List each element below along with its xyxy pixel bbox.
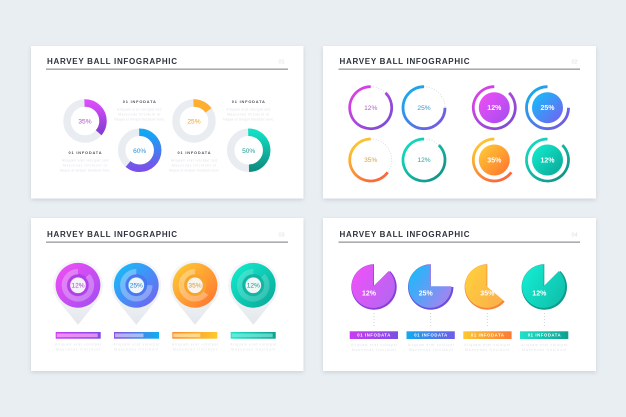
pie 12% teal: 12%: [532, 291, 547, 298]
progress bar blue: [114, 332, 159, 339]
progress bar orange: [172, 332, 217, 339]
text block: infodata below 25%: [169, 150, 219, 172]
label teal: 01 INFODATA: [528, 333, 561, 338]
donut 25%: [176, 103, 212, 139]
pie 35% orange: 35%: [480, 291, 495, 298]
pie 12% purple: [351, 264, 397, 310]
progress bar teal: [231, 332, 276, 339]
text block: infodata above 60%: Aliquam erat volutpat sed: [117, 107, 161, 111]
ring with disc 25% blue: 25%: [540, 105, 555, 112]
captions under labels: Aliquam erat volutpat: [408, 343, 454, 347]
text block: infodata below 25%: 01 INFODATA: [178, 150, 211, 155]
captions under bars: Aliquam erat volutpat: [172, 342, 218, 346]
captions under labels: [351, 343, 567, 352]
text block: infodata below 35%: [60, 150, 110, 172]
panel: donut charts 01: [31, 46, 304, 198]
text block: infodata below 35%: 01 INFODATA: [68, 150, 102, 155]
heading 04: HARVEY BALL INFOGRAPHIC: [340, 230, 470, 239]
captions under bars: [55, 342, 276, 352]
donut 50%: 50%: [242, 148, 255, 155]
text block: infodata above 60%: 01 INFODATA: [123, 99, 156, 104]
page number 03: 03: [278, 232, 285, 238]
captions under labels: Maecenas tincidunt: [465, 348, 509, 352]
captions under labels: Aliquam erat volutpat: [521, 343, 567, 347]
pie 12% purple: 12%: [362, 291, 377, 298]
ring 12% teal: 12%: [417, 157, 431, 164]
ring with disc 12% teal: 12%: [540, 157, 555, 164]
text block: infodata below 25%: Aliquam erat volutpat sed: [171, 158, 217, 162]
donut 50%: [231, 132, 267, 168]
pin 12% purple: 12%: [71, 282, 85, 289]
ring 25% blue: [403, 87, 445, 129]
page number 02: 02: [571, 60, 578, 66]
text block: infodata above 50%: 01 INFODATA: [232, 99, 265, 104]
heading 01: HARVEY BALL INFOGRAPHIC: [47, 57, 177, 66]
panel: pie charts 04: [323, 218, 596, 371]
page number 04: 04: [571, 232, 578, 238]
label teal: [520, 331, 568, 339]
text block: infodata below 25%: Maecenas tincidunt ut: [172, 163, 216, 167]
ring 35% orange: 35%: [364, 157, 377, 164]
captions under labels: Maecenas tincidunt: [409, 348, 453, 352]
heading 03: HARVEY BALL INFOGRAPHIC: [47, 230, 177, 239]
donut 35%: 35%: [78, 118, 92, 125]
heading 02: HARVEY BALL INFOGRAPHIC: [340, 57, 470, 66]
pie 25% blue: 25%: [419, 291, 433, 298]
text block: infodata above 50%: Maecenas tincidunt ut: [227, 112, 269, 116]
ring with disc 25% blue: [526, 87, 568, 129]
label orange: [463, 331, 512, 339]
pin 35% orange: 35%: [188, 282, 202, 289]
pin 12% teal: 12%: [247, 282, 260, 289]
ring 25% blue: 25%: [417, 105, 431, 112]
captions under labels: Aliquam erat volutpat: [351, 343, 397, 347]
text block: infodata above 60%: Maecenas tincidunt ut: [118, 112, 160, 116]
captions under bars: Maecenas tincidunt: [173, 348, 217, 352]
label orange: 01 INFODATA: [471, 333, 504, 338]
text block: infodata above 50%: Neque et tempor tincidunt nunc: [223, 118, 274, 122]
text block: infodata below 35%: Aliquam erat volutpat sed: [62, 158, 108, 162]
donut 35%: [67, 103, 103, 139]
pin 35% orange: [170, 260, 220, 325]
dotted connectors: [374, 313, 544, 327]
captions under bars: Aliquam erat volutpat: [55, 342, 101, 346]
ring 12% teal: [403, 139, 445, 181]
pie 12% teal: [522, 264, 567, 310]
captions under bars: Maecenas tincidunt: [56, 348, 100, 352]
text block: infodata below 35%: Neque et tempor tincidunt nunc: [60, 168, 110, 172]
ring 35% orange: [350, 139, 392, 181]
captions under bars: Aliquam erat volutpat: [230, 342, 276, 346]
pin 25% blue: 25%: [130, 282, 143, 289]
donut 60%: [122, 132, 158, 168]
ring with disc 12% purple: 12%: [487, 105, 502, 112]
pin 12% teal: [228, 260, 278, 325]
ring with disc 35% orange: 35%: [487, 157, 502, 164]
ring 12% purple: [350, 87, 392, 129]
pin 25% blue: [111, 260, 161, 325]
text block: infodata above 60%: Neque et tempor tincidunt nunc: [114, 118, 165, 122]
label blue: [406, 331, 455, 339]
label purple: 01 INFODATA: [357, 333, 390, 338]
captions under bars: Maecenas tincidunt: [114, 348, 158, 352]
ring with disc 12% purple: [473, 87, 515, 129]
text block: infodata above 60%: [114, 99, 165, 122]
text block: infodata above 50%: [223, 99, 274, 122]
pin 12% purple: [53, 260, 103, 325]
pie 35% orange: [465, 264, 505, 310]
ring with disc 12% teal: [527, 139, 569, 181]
captions under labels: Aliquam erat volutpat: [464, 343, 510, 347]
captions under labels: Maecenas tincidunt: [352, 348, 396, 352]
text block: infodata below 35%: Maecenas tincidunt ut: [63, 163, 107, 167]
page number 01: 01: [278, 60, 285, 66]
captions under bars: Aliquam erat volutpat: [113, 342, 159, 346]
pie 25% blue: [408, 264, 453, 310]
panel: map pins 03: [31, 218, 304, 371]
label purple: [350, 331, 398, 339]
label blue: 01 INFODATA: [414, 333, 447, 338]
progress bar purple: [56, 332, 101, 339]
captions under bars: Maecenas tincidunt: [231, 348, 275, 352]
captions under labels: Maecenas tincidunt: [522, 348, 566, 352]
text block: infodata above 50%: Aliquam erat volutpat sed: [226, 107, 270, 111]
ring with disc 35% orange: [473, 139, 511, 181]
panel: ring charts 02: [323, 46, 596, 198]
text block: infodata below 25%: Neque et tempor tincidunt nunc: [169, 168, 219, 172]
ring 12% purple: 12%: [364, 105, 377, 112]
donut 60%: 60%: [133, 148, 146, 155]
donut 25%: 25%: [187, 118, 201, 125]
